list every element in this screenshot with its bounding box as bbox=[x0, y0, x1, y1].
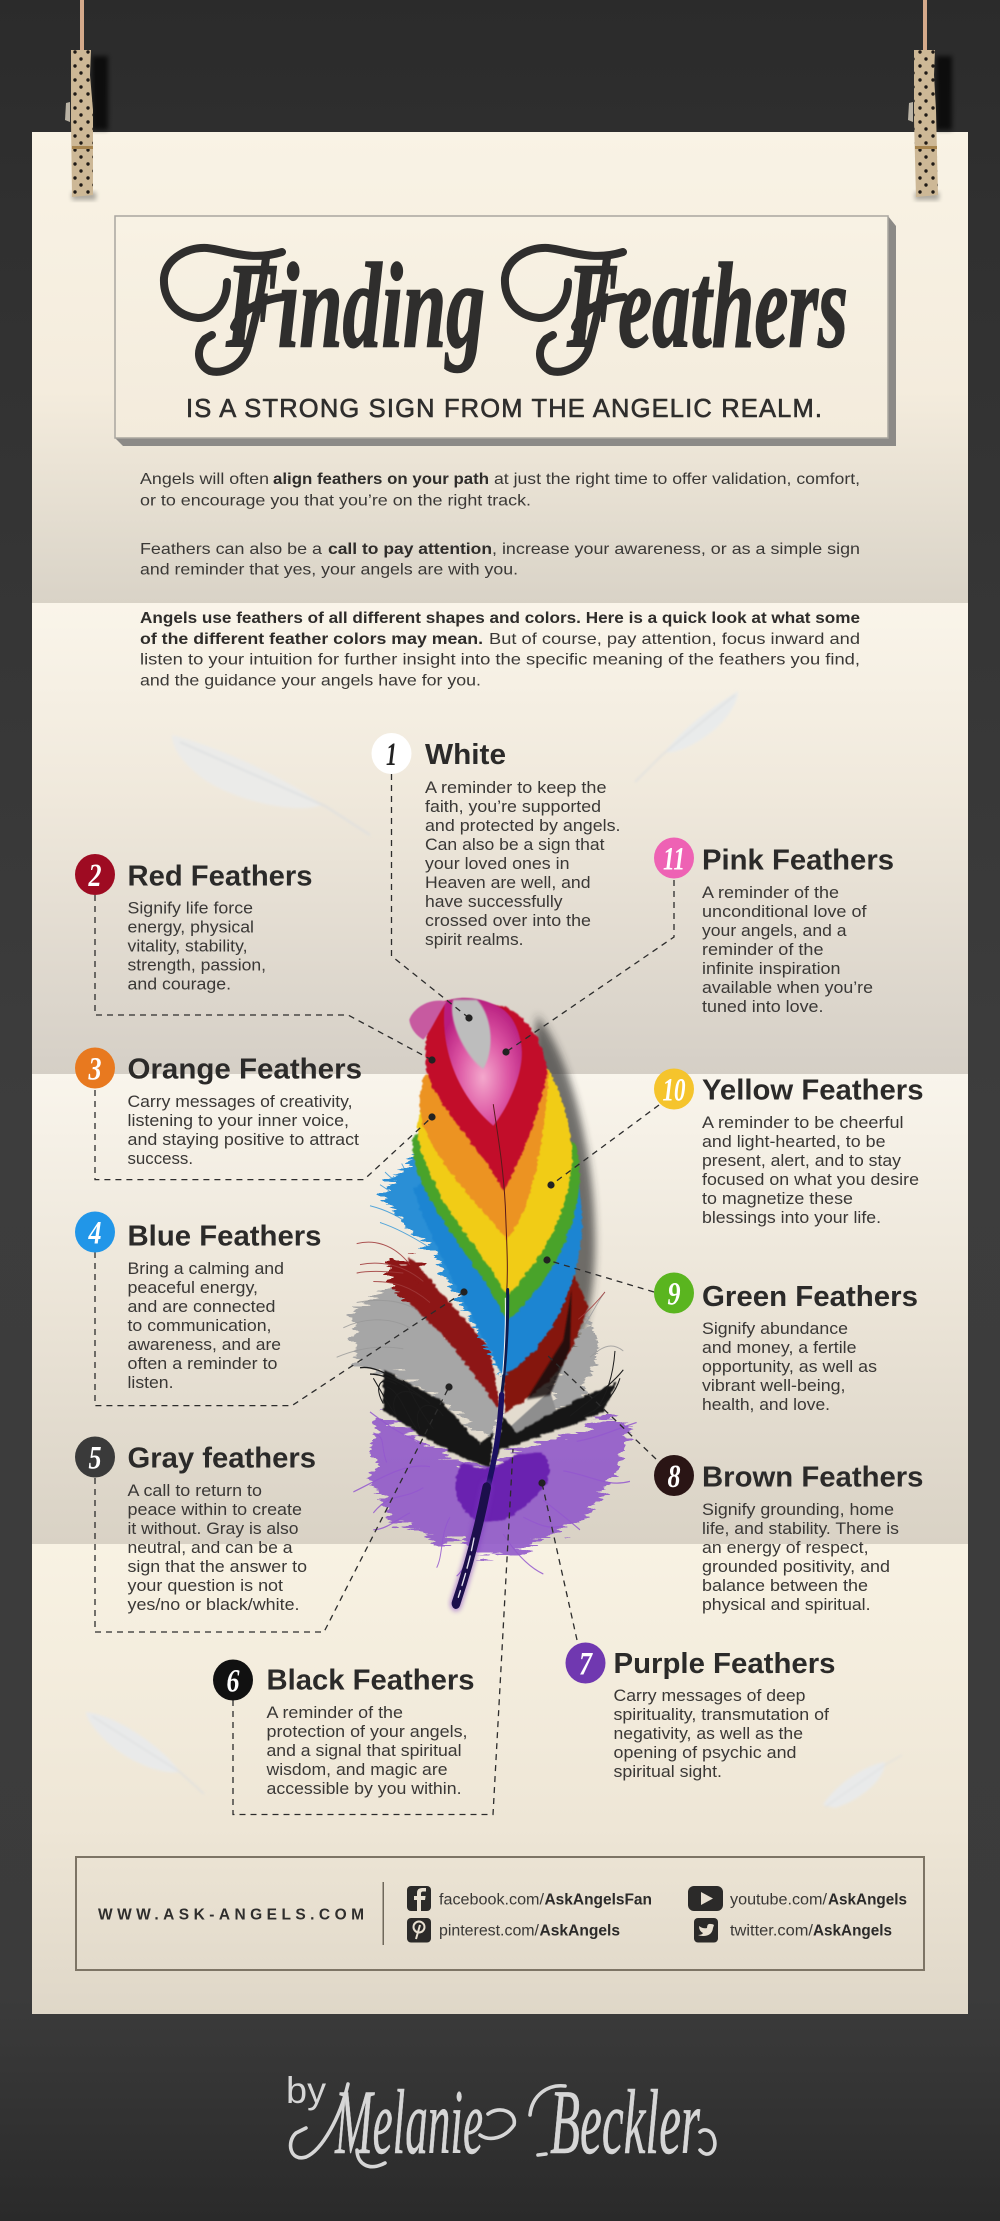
item 6: Black Feathers: 6 bbox=[226, 1664, 240, 1700]
intro text bbox=[140, 471, 860, 690]
gray barbs bbox=[337, 1281, 623, 1446]
item 5: Gray feathers: yes/no or black/white. bbox=[128, 1596, 300, 1614]
item 4: Blue Feathers bbox=[75, 1212, 322, 1392]
item 4: Blue Feathers: 4 bbox=[88, 1216, 102, 1252]
pink centre bbox=[409, 998, 522, 1126]
item 5: Gray feathers: 5 bbox=[88, 1440, 102, 1476]
icon: youtube bbox=[688, 1886, 723, 1911]
icon: left clothespin and string bbox=[65, 0, 108, 200]
item 6: Black Feathers: A reminder of the bbox=[266, 1704, 403, 1722]
footer links box: AskAngels bbox=[540, 1922, 620, 1940]
intro text: call to pay attention bbox=[328, 541, 492, 558]
item 8: Brown Feathers: life, and stability. There is bbox=[702, 1520, 899, 1538]
footer links box: twitter.com/ bbox=[730, 1922, 814, 1940]
item 6: Black Feathers: wisdom, and magic are bbox=[265, 1761, 448, 1779]
yellow barbs bbox=[417, 1054, 572, 1296]
signature: by Melanie Beckler: by bbox=[286, 2070, 327, 2111]
item 5: Gray feathers: A call to return to bbox=[128, 1482, 262, 1500]
item 8: Brown Feathers: 8 bbox=[668, 1459, 680, 1495]
item 1: White: crossed over into the bbox=[425, 912, 591, 930]
footer links box: pinterest.com/ bbox=[439, 1922, 540, 1940]
item 6: Black Feathers: Black Feathers bbox=[266, 1664, 474, 1696]
item 10: Yellow Feathers: blessings into your life. bbox=[702, 1209, 881, 1227]
item 5: Gray feathers bbox=[75, 1436, 316, 1614]
subtitle: IS A STRONG SIGN FROM THE ANGELIC REALM. bbox=[186, 395, 822, 423]
signature: by Melanie Beckler: Melanie bbox=[334, 2071, 483, 2173]
item 4: Blue Feathers: listen. bbox=[128, 1374, 174, 1392]
intro text: or to encourage you that you’re on the right track. bbox=[140, 492, 531, 510]
item 7: Purple Feathers: Carry messages of deep bbox=[614, 1687, 806, 1705]
intro text: , increase your awareness, or as a simple sign bbox=[492, 541, 860, 558]
item 5: Gray feathers: neutral, and can be a bbox=[128, 1539, 293, 1557]
intro text: Angels will often bbox=[140, 471, 269, 488]
item 6: Black Feathers: protection of your angels, bbox=[266, 1723, 468, 1741]
item 11: Pink Feathers: infinite inspiration bbox=[702, 960, 840, 978]
signature: by Melanie Beckler bbox=[286, 2070, 715, 2173]
item 5: Gray feathers: your question is not bbox=[128, 1577, 283, 1595]
item 9: Green Feathers: 9 bbox=[668, 1276, 680, 1312]
item 2: Red Feathers: Signify life force bbox=[128, 900, 253, 918]
item 7: Purple Feathers: spirituality, transmutation of bbox=[614, 1706, 829, 1724]
footer links box: AskAngels bbox=[828, 1892, 907, 1908]
item 10: Yellow Feathers: A reminder to be cheerful bbox=[702, 1114, 904, 1132]
dark red barbs bbox=[357, 1242, 605, 1412]
item 4: Blue Feathers: to communication, bbox=[128, 1317, 272, 1335]
intro text: But of course, pay attention, focus inward and bbox=[489, 631, 860, 648]
item 1: White: White bbox=[425, 739, 506, 771]
orange barbs bbox=[420, 1054, 549, 1239]
intro text: and reminder that yes, your angels are with you. bbox=[140, 562, 518, 578]
item 2: Red Feathers: strength, passion, bbox=[128, 956, 266, 974]
item 9: Green Feathers: Signify abundance bbox=[702, 1320, 848, 1338]
item 3: Orange Feathers: success. bbox=[128, 1150, 193, 1168]
blue barbs bbox=[370, 1138, 582, 1376]
heading: Finding Feathers: Finding bbox=[225, 238, 485, 374]
icon: facebook bbox=[407, 1886, 431, 1911]
item 11: Pink Feathers: available when you’re bbox=[702, 979, 873, 997]
connector lines bbox=[95, 774, 674, 1814]
item 10: Yellow Feathers: and light-hearted, to be bbox=[702, 1133, 886, 1151]
item 5: Gray feathers: sign that the answer to bbox=[128, 1558, 307, 1576]
item 10: Yellow Feathers: focused on what you desire bbox=[702, 1171, 919, 1189]
signature: by Melanie Beckler: Beckler bbox=[550, 2071, 701, 2173]
icon: right clothespin and string bbox=[908, 0, 952, 200]
item 11: Pink Feathers: tuned into love. bbox=[702, 998, 824, 1016]
item 7: Purple Feathers: opening of psychic and bbox=[614, 1744, 796, 1762]
item 9: Green Feathers: and money, a fertile bbox=[702, 1339, 856, 1357]
item 3: Orange Feathers bbox=[75, 1048, 362, 1168]
panel: paper sheet bbox=[32, 132, 968, 2014]
item 2: Red Feathers: energy, physical bbox=[128, 918, 254, 936]
item 3: Orange Feathers: Orange Feathers bbox=[128, 1054, 362, 1086]
intro text: and the guidance your angels have for you. bbox=[140, 672, 481, 690]
item 2: Red Feathers: vitality, stability, bbox=[128, 938, 248, 956]
green barbs bbox=[412, 1096, 580, 1321]
decorative white feather bottom right bbox=[823, 1755, 902, 1808]
item 1: White bbox=[372, 733, 620, 949]
item 4: Blue Feathers: peaceful energy, bbox=[128, 1279, 258, 1297]
item 4: Blue Feathers: Blue Feathers bbox=[128, 1220, 322, 1252]
item 8: Brown Feathers: balance between the bbox=[702, 1577, 868, 1595]
intro text: Feathers can also be a bbox=[140, 541, 322, 558]
item 1: White: and protected by angels. bbox=[425, 817, 620, 835]
item 4: Blue Feathers: awareness, and are bbox=[128, 1336, 281, 1354]
shaft bbox=[456, 1105, 508, 1603]
red barbs bbox=[425, 999, 547, 1191]
item 8: Brown Feathers: grounded positivity, and bbox=[702, 1558, 890, 1576]
footer links box: facebook.com/ bbox=[439, 1892, 545, 1908]
item 2: Red Feathers bbox=[75, 854, 312, 994]
item 10: Yellow Feathers bbox=[654, 1068, 924, 1227]
decorative white feather bottom left bbox=[86, 1712, 204, 1794]
intro text: at just the right time to offer validation, comfort, bbox=[494, 471, 860, 488]
heading: Finding Feathers bbox=[164, 238, 848, 374]
purple barbs bbox=[353, 1412, 637, 1576]
intro text: of the different feather colors may mean. bbox=[140, 631, 483, 648]
item 3: Orange Feathers: and staying positive to attract bbox=[128, 1131, 359, 1149]
item 10: Yellow Feathers: to magnetize these bbox=[702, 1190, 853, 1208]
footer links box bbox=[76, 1857, 924, 1970]
decorative white feather top right bbox=[635, 691, 738, 782]
item 1: White: have successfully bbox=[425, 893, 563, 911]
item 10: Yellow Feathers: 10 bbox=[662, 1072, 686, 1108]
item 11: Pink Feathers: A reminder of the bbox=[702, 884, 839, 902]
item 2: Red Feathers: Red Feathers bbox=[128, 860, 312, 892]
item 3: Orange Feathers: 3 bbox=[88, 1052, 102, 1088]
item 11: Pink Feathers: reminder of the bbox=[702, 941, 824, 959]
item 4: Blue Feathers: and are connected bbox=[128, 1298, 276, 1316]
shadow bbox=[517, 1016, 595, 1370]
icon: twitter bbox=[694, 1918, 718, 1942]
item 11: Pink Feathers: Pink Feathers bbox=[702, 844, 894, 876]
item 8: Brown Feathers bbox=[654, 1455, 924, 1614]
footer links box: youtube.com/ bbox=[730, 1892, 828, 1908]
item 2: Red Feathers: and courage. bbox=[128, 976, 231, 994]
item 2: Red Feathers: 2 bbox=[88, 858, 102, 894]
item 1: White: faith, you’re supported bbox=[425, 798, 601, 816]
item 10: Yellow Feathers: Yellow Feathers bbox=[702, 1074, 924, 1106]
decorative white feather top left bbox=[172, 735, 370, 835]
item 11: Pink Feathers: 11 bbox=[663, 842, 685, 878]
item 1: White: spirit realms. bbox=[425, 931, 524, 949]
item 1: White: Heaven are well, and bbox=[425, 874, 590, 892]
item 7: Purple Feathers: 7 bbox=[579, 1646, 593, 1682]
item 6: Black Feathers: accessible by you within. bbox=[266, 1780, 462, 1798]
intro text: align feathers on your path bbox=[273, 471, 489, 488]
item 4: Blue Feathers: often a reminder to bbox=[128, 1355, 278, 1373]
title box bbox=[115, 216, 896, 446]
item 5: Gray feathers: peace within to create bbox=[128, 1501, 302, 1519]
item 8: Brown Feathers: Signify grounding, home bbox=[702, 1501, 894, 1519]
item 7: Purple Feathers: spiritual sight. bbox=[614, 1763, 722, 1781]
item 9: Green Feathers: vibrant well-being, bbox=[702, 1377, 846, 1395]
footer links box: AskAngelsFan bbox=[544, 1892, 652, 1908]
item 10: Yellow Feathers: present, alert, and to stay bbox=[702, 1152, 902, 1170]
item 9: Green Feathers: health, and love. bbox=[702, 1396, 830, 1414]
item 11: Pink Feathers: your angels, and a bbox=[702, 922, 847, 940]
item 6: Black Feathers bbox=[213, 1660, 474, 1798]
item 9: Green Feathers: opportunity, as well as bbox=[702, 1358, 877, 1376]
feather illustration bbox=[337, 998, 637, 1603]
item 5: Gray feathers: it without. Gray is also bbox=[128, 1520, 298, 1538]
item 8: Brown Feathers: an energy of respect, bbox=[702, 1539, 868, 1557]
item 11: Pink Feathers: unconditional love of bbox=[702, 903, 867, 921]
website: WWW.ASK-ANGELS.COM bbox=[98, 1906, 364, 1924]
icon: pinterest bbox=[407, 1918, 431, 1942]
item 8: Brown Feathers: physical and spiritual. bbox=[702, 1596, 870, 1614]
item 11: Pink Feathers bbox=[654, 838, 894, 1016]
item 8: Brown Feathers: Brown Feathers bbox=[702, 1462, 924, 1494]
item 9: Green Feathers: Green Feathers bbox=[702, 1281, 918, 1313]
item 5: Gray feathers: Gray feathers bbox=[128, 1442, 316, 1474]
item 9: Green Feathers bbox=[654, 1272, 918, 1414]
item 6: Black Feathers: and a signal that spiritual bbox=[266, 1742, 462, 1760]
item 7: Purple Feathers bbox=[566, 1642, 836, 1781]
intro text: listen to your intuition for further insight into the specific meaning of the feathers you find, bbox=[140, 652, 860, 668]
footer links box: AskAngels bbox=[813, 1922, 892, 1940]
black barbs bbox=[360, 1351, 623, 1467]
item 7: Purple Feathers: negativity, as well as the bbox=[614, 1725, 803, 1743]
item 1: White: your loved ones in bbox=[425, 855, 570, 873]
item 4: Blue Feathers: Bring a calming and bbox=[128, 1260, 284, 1278]
item 1: White: Can also be a sign that bbox=[425, 836, 605, 854]
item 3: Orange Feathers: listening to your inner voice, bbox=[128, 1112, 349, 1130]
item 7: Purple Feathers: Purple Feathers bbox=[614, 1648, 836, 1680]
item 1: White: A reminder to keep the bbox=[425, 779, 606, 797]
intro text: Angels use feathers of all different shapes and colors. Here is a quick look at what some bbox=[140, 610, 860, 627]
item 1: White: 1 bbox=[386, 737, 397, 773]
item 3: Orange Feathers: Carry messages of creativity, bbox=[128, 1093, 352, 1111]
